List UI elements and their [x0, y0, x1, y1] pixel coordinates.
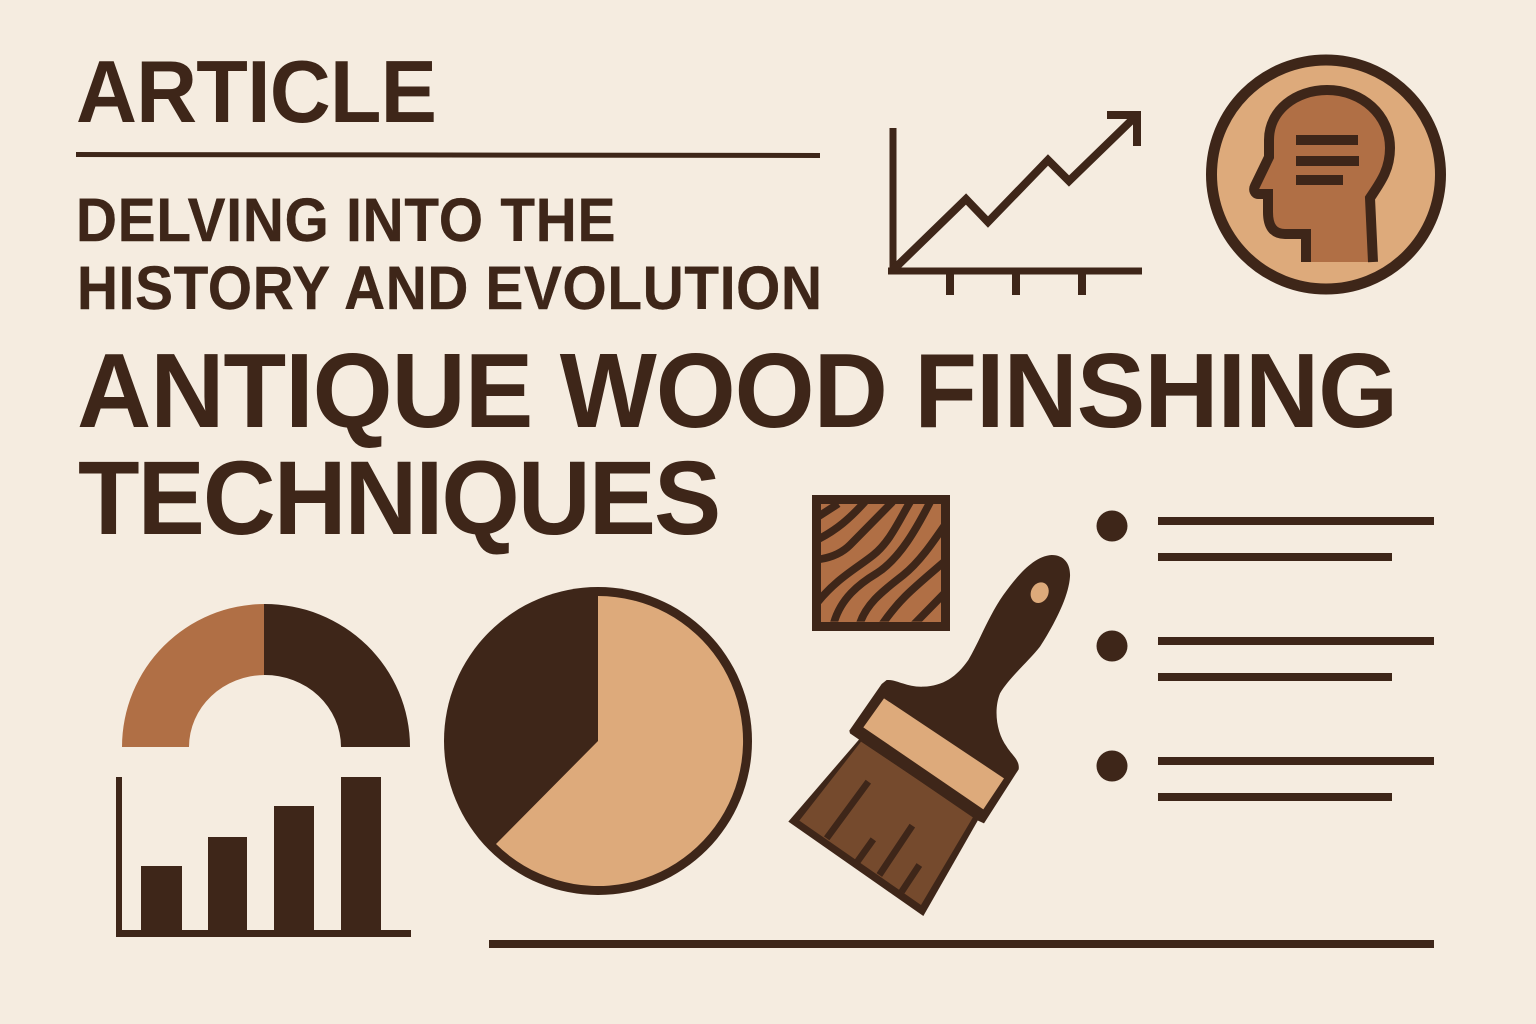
- brush bristles: [788, 738, 980, 916]
- bar chart: [116, 777, 411, 937]
- icon: rising line chart: [888, 115, 1142, 295]
- icon: paint brush: [788, 555, 1070, 916]
- icon: head with text lines: [1212, 60, 1440, 289]
- pie chart: [444, 587, 752, 895]
- bullet list: [1096, 510, 1434, 797]
- icon: wood grain square: [816, 500, 947, 626]
- handle hole: [1027, 579, 1052, 606]
- heading: article label: ARTICLE: [76, 43, 437, 141]
- main title line 2: TECHNIQUES: [78, 439, 721, 556]
- icon: half donut chart: [122, 604, 410, 747]
- subtitle line 1: DELVING INTO THE: [76, 187, 615, 254]
- brush ferrule: [863, 698, 1004, 809]
- subtitle line 2: HISTORY AND EVOLUTION: [77, 255, 822, 322]
- brush handle: [849, 555, 1070, 823]
- main title line 1: ANTIQUE WOOD FINSHING: [77, 332, 1398, 450]
